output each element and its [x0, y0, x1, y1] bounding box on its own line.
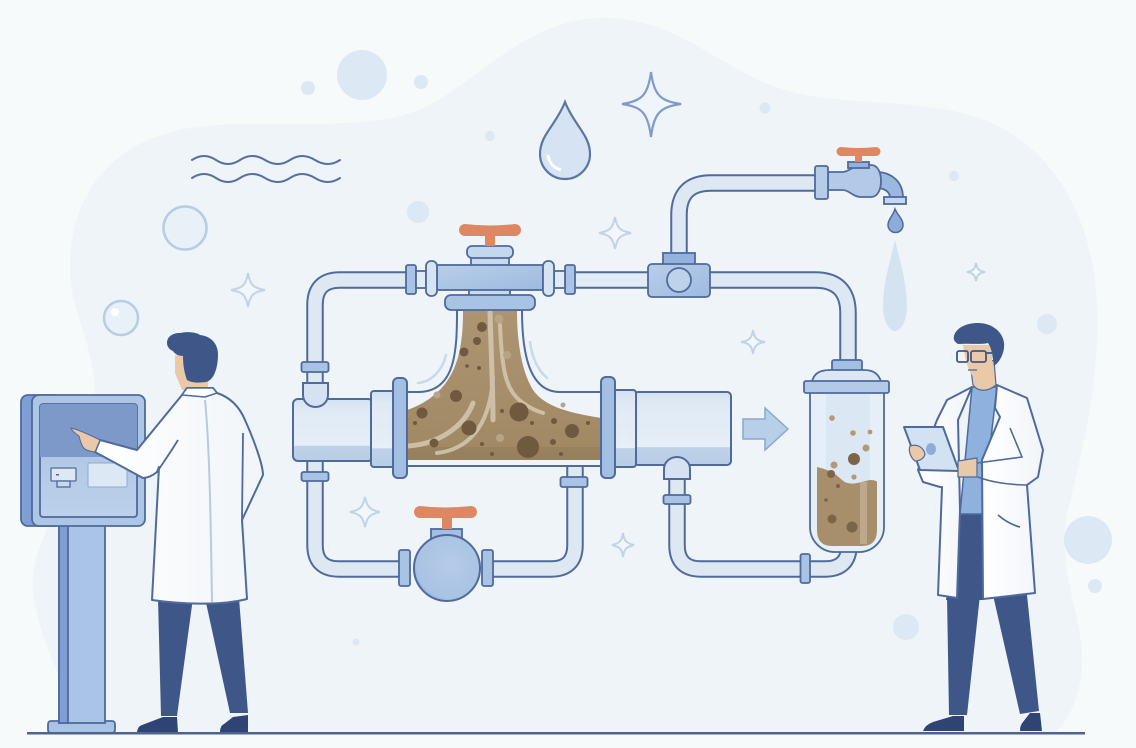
- main pipe right section: [612, 390, 731, 479]
- neck and head: [971, 360, 996, 390]
- orange handle: [414, 506, 477, 529]
- top-right pipe: [708, 280, 848, 365]
- kiosk pole: [59, 525, 105, 723]
- lab coat right: [982, 385, 1043, 599]
- technician right: [904, 323, 1043, 731]
- legs: [947, 595, 980, 715]
- pointing hand: [71, 428, 100, 452]
- T-junction transparent pipe: [405, 310, 603, 466]
- shoes: [923, 716, 964, 731]
- outlet elbow: [664, 457, 690, 479]
- shirt: [960, 387, 997, 514]
- sparkle large: [622, 72, 681, 137]
- faucet: [815, 147, 906, 204]
- hair: [954, 323, 1004, 366]
- orange handle: [459, 224, 521, 246]
- top-left pipe loop: [315, 280, 410, 387]
- hands: [909, 445, 925, 461]
- junction box: [648, 253, 710, 297]
- kiosk screen: [40, 404, 137, 517]
- back seam: [205, 400, 212, 602]
- outlined bubble small: [104, 301, 138, 335]
- pipes: [315, 183, 849, 569]
- kiosk data card: [88, 463, 127, 487]
- wave lines: [192, 156, 340, 182]
- outlined bubble large: [164, 206, 206, 250]
- settling tank: [804, 360, 889, 552]
- ground line: [27, 732, 1085, 734]
- kiosk small widget: [51, 468, 76, 481]
- orange handle: [836, 147, 880, 162]
- main pipe left section: [293, 383, 395, 467]
- technician left: [71, 332, 263, 732]
- flow arrow: [743, 408, 788, 450]
- flow streaks: [408, 312, 543, 453]
- bypass pipe: [315, 458, 575, 569]
- tank sediment: [817, 467, 877, 546]
- pipe collars: [302, 362, 810, 583]
- legs: [158, 598, 193, 716]
- sediment particles: [413, 322, 590, 458]
- tablet: [904, 427, 959, 471]
- lab coat: [95, 388, 263, 604]
- water drop: [540, 102, 590, 179]
- top gate valve: [406, 224, 575, 310]
- riser pipe to faucet: [679, 183, 818, 256]
- sediment fill: [407, 310, 601, 460]
- shoes: [137, 717, 178, 732]
- waist: [946, 510, 984, 600]
- bottom ball valve: [399, 506, 493, 601]
- bubbles: [301, 50, 1112, 646]
- left elbow: [303, 383, 328, 407]
- falling drop small: [888, 209, 903, 233]
- kiosk housing: [21, 395, 61, 526]
- kiosk base: [48, 721, 115, 733]
- control kiosk: [21, 395, 145, 733]
- falling drop pale: [883, 240, 907, 331]
- lab coat left: [918, 387, 972, 598]
- hair: [167, 332, 218, 383]
- glasses: [957, 351, 992, 362]
- main pipe flanges: [393, 377, 615, 478]
- sparkles small: [231, 217, 985, 557]
- flow motion marks: [418, 342, 547, 383]
- top connecting pipe: [570, 271, 650, 289]
- sediment dark lower band: [407, 447, 601, 460]
- outlet pipe: [677, 476, 849, 569]
- head skin: [175, 355, 208, 390]
